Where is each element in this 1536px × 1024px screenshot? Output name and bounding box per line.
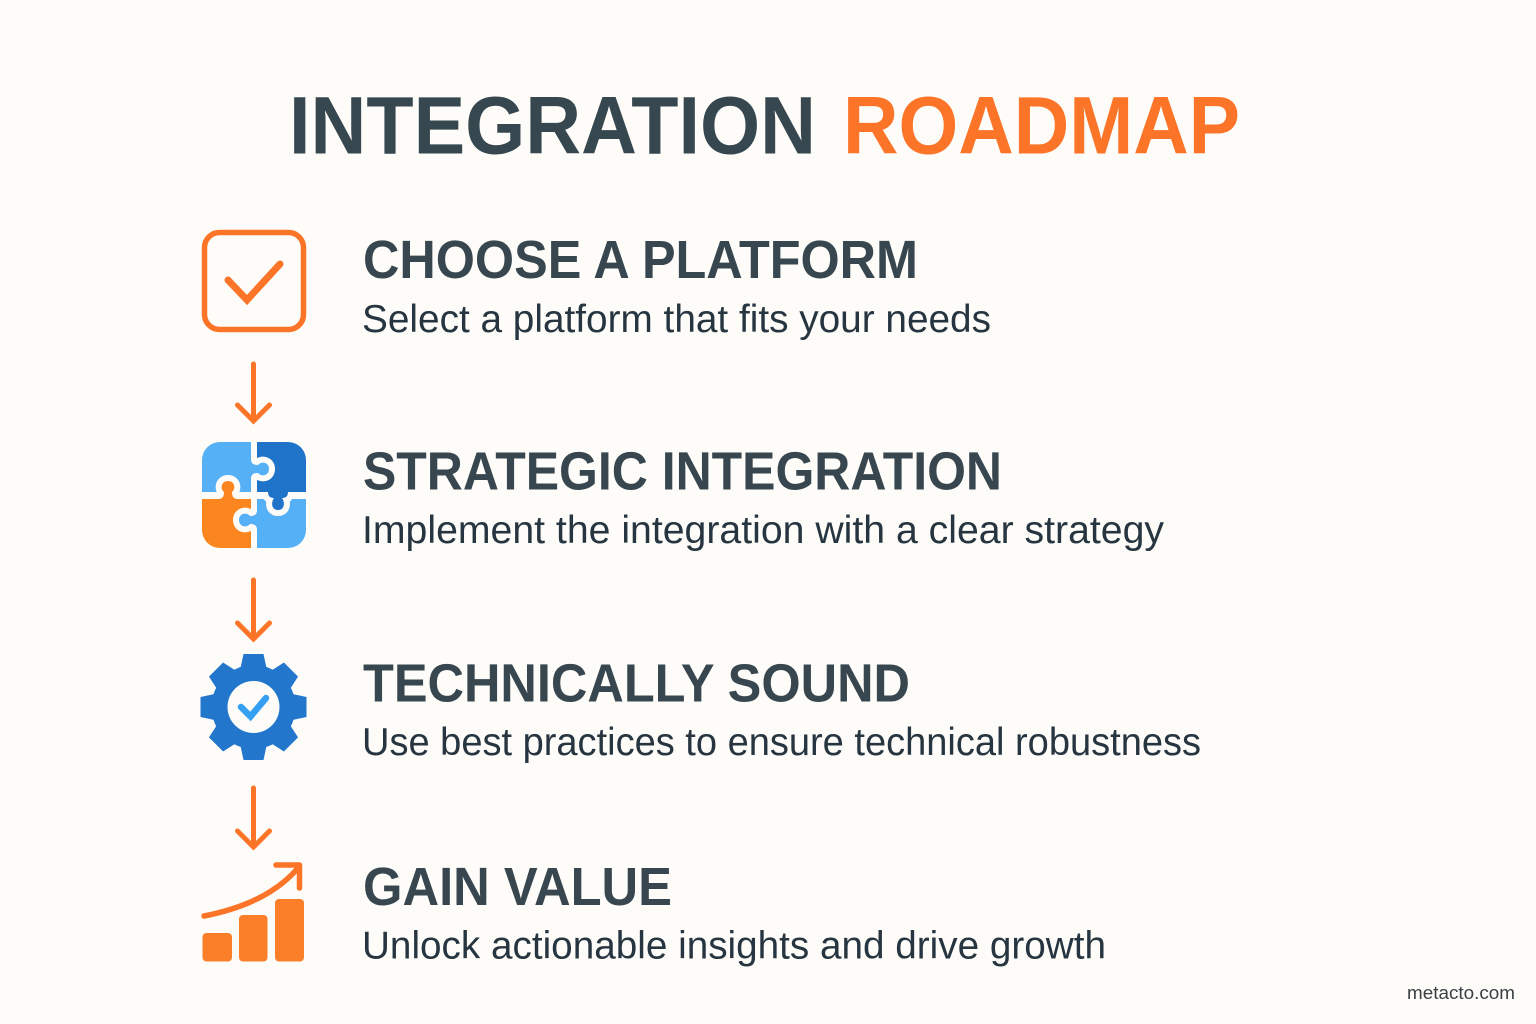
icon: puzzle: [202, 442, 306, 548]
text: step 4: Unlock actionable insights and drive growth: [362, 924, 1106, 968]
text: step 1: [362, 231, 991, 341]
text: step 4: GAIN VALUE: [363, 858, 672, 917]
arrow: step 3 to step 4: [238, 788, 270, 847]
text: step 2: [362, 442, 1164, 552]
puzzle knobs: [218, 459, 288, 530]
text: step 1: Select a platform that fits your needs: [362, 298, 991, 341]
text: step 1: CHOOSE A PLATFORM: [363, 231, 918, 290]
text: step 4: [362, 858, 1106, 968]
icon: growth chart: [202, 865, 304, 962]
puzzle gaps: [218, 459, 288, 530]
text: step 3: [362, 654, 1201, 764]
arrow: step 2 to step 3: [238, 580, 270, 639]
text: step 3: Use best practices to ensure technical robustness: [362, 721, 1201, 764]
title: [289, 80, 1240, 172]
text: step 2: Implement the integration with a clear strategy: [362, 509, 1164, 552]
icon: checkbox: [204, 232, 304, 330]
arrow: step 1 to step 2: [238, 364, 270, 421]
icon: gear: [200, 654, 306, 760]
text: step 3: TECHNICALLY SOUND: [363, 654, 910, 714]
title: ROADMAP: [843, 80, 1240, 172]
title: INTEGRATION: [289, 80, 816, 172]
text: step 2: STRATEGIC INTEGRATION: [363, 442, 1002, 502]
watermark: metacto.com: [1407, 983, 1515, 1003]
